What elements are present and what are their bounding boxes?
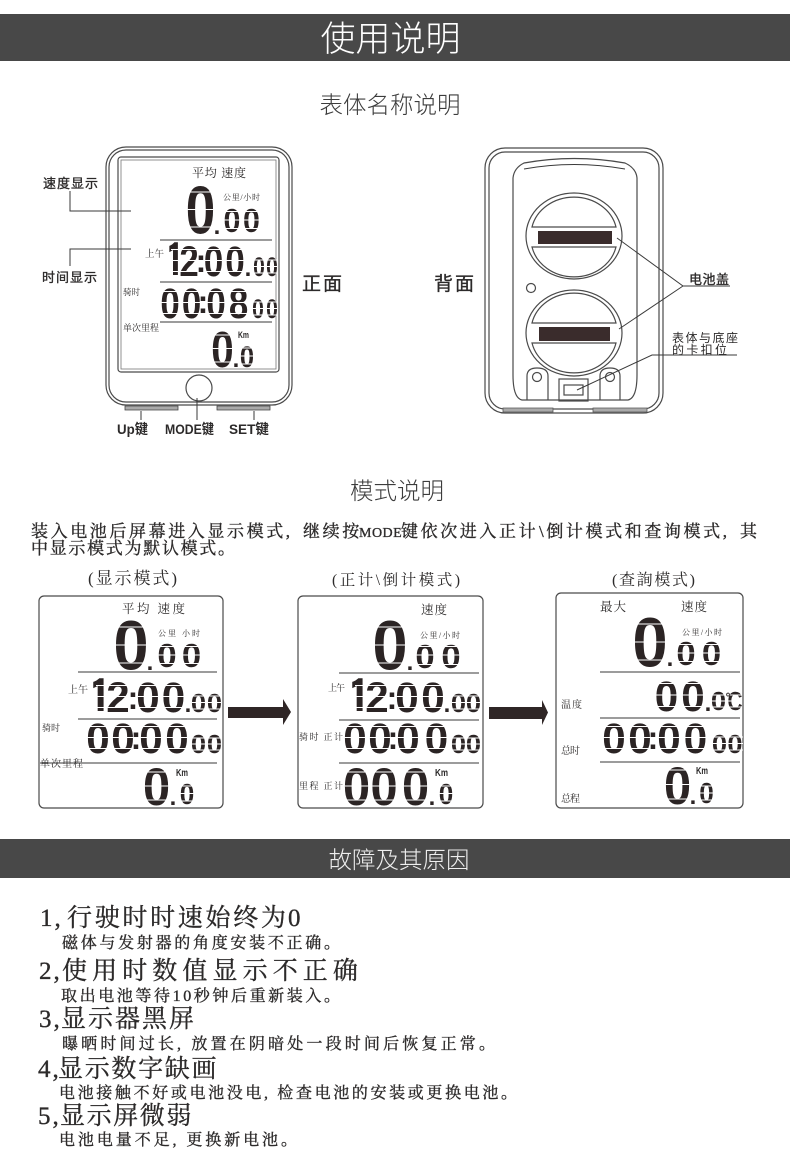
time reading: 0 (207, 689, 222, 718)
label: single trip: 单次里程 (40, 757, 83, 770)
total distance reading: . (690, 783, 696, 810)
trip reading: 0 (180, 778, 194, 810)
callout: battery cover: 电池盖 (689, 272, 729, 287)
time reading 12:00.00: 0 (266, 253, 278, 283)
icon: mode button (186, 375, 212, 401)
header bar: usage instructions: 使用说明 (320, 20, 461, 59)
time reading: : (387, 680, 397, 716)
time reading: 1 (89, 676, 111, 718)
speed reading: 0 (372, 607, 408, 685)
trip reading (143, 757, 194, 816)
temperature reading: . (705, 690, 711, 717)
time reading (89, 674, 222, 722)
speed reading (372, 607, 461, 685)
total distance reading: 0 (699, 777, 714, 809)
total time reading: 0 (727, 730, 743, 759)
ride time reading 00:08 00: : (198, 284, 208, 320)
fault 4: 电池接触不好或电池没电, 检查电池的安装或更换电池。 (59, 1084, 517, 1102)
arrow: display to count mode (228, 699, 291, 725)
time reading: 0 (451, 689, 466, 718)
time reading 12:00.00: . (245, 255, 251, 282)
ride time reading (86, 715, 222, 763)
time reading 12:00.00: 0 (225, 239, 245, 286)
text: mode introduction: 中显示模式为默认模式。 (31, 539, 237, 558)
time reading 12:00.00: 1 (166, 239, 184, 281)
fault 3: 曝晒时间过长, 放置在阴暗处一段时间后恢复正常。 (62, 1035, 495, 1053)
label: AM: 上午 (68, 683, 88, 696)
time reading: . (185, 691, 191, 718)
button labels (117, 421, 269, 437)
fault 2: 使用时数值显示不正确 (62, 957, 363, 985)
label: km: Km (238, 330, 249, 341)
fault 1: 磁体与发射器的角度安装不正确。 (62, 934, 340, 952)
time reading 12:00.00 (166, 239, 278, 286)
dividers (600, 672, 740, 762)
battery cover top (526, 193, 622, 279)
time reading 12:00.00: : (196, 243, 206, 279)
fault 1: 0 (288, 905, 300, 932)
button leader lines (141, 398, 254, 420)
panel: count mode screen (298, 596, 483, 816)
callout: body and base latch: 表体与底座 (672, 330, 738, 345)
fault 1: 行驶时时速始终为 (67, 904, 289, 932)
device outline front (106, 147, 292, 410)
label: km per hour: 公里/小时 (420, 630, 460, 640)
speed reading: 0 (676, 636, 696, 673)
time reading: : (128, 680, 138, 716)
total time reading: 0 (712, 730, 727, 759)
fault 4 (38, 1055, 517, 1102)
trip reading 0.0 km: 0 (211, 320, 234, 378)
speed reading 0.00: 0 (243, 202, 260, 239)
label: temperature: 温度 (561, 698, 582, 711)
caption: count mode: (正计\倒计模式) (332, 570, 460, 589)
ride time reading 00:08 00: 0 (182, 281, 201, 328)
callout: speed display (43, 176, 131, 211)
temperature reading: 0 (681, 673, 705, 721)
time reading: 0 (395, 674, 419, 722)
fault 4: 4, (38, 1056, 61, 1083)
time reading (348, 674, 481, 722)
fault 5: 电池电量不足, 更换新电池。 (59, 1131, 297, 1149)
caption: display mode: (显示模式) (88, 569, 177, 588)
temperature reading: ° (726, 690, 731, 704)
dividers (40, 672, 217, 763)
fault 5: 5, (38, 1103, 61, 1130)
speed reading 0.00: 0 (224, 202, 240, 239)
distance reading: 0 (343, 757, 370, 816)
small hole (526, 284, 536, 292)
trip reading 0.0 km: . (233, 346, 239, 373)
speed reading: . (407, 649, 413, 676)
label: AM: 上午 (328, 682, 345, 693)
distance reading: 0 (370, 757, 398, 816)
text: mode introduction: \倒计模式和查询模式, (539, 522, 730, 541)
speed reading: 0 (182, 638, 201, 675)
caption: query mode: (查詢模式) (612, 570, 695, 589)
panel: display mode screen (39, 596, 223, 816)
label: km: Km (176, 768, 188, 779)
arrow: count to query mode (489, 700, 548, 725)
label: average speed: 平均 速度 (192, 165, 246, 180)
temperature reading: 0 (655, 673, 678, 721)
panel: query mode screen (556, 593, 743, 815)
ride time reading: 0 (425, 715, 448, 763)
time reading 12:00.00: 0 (253, 253, 265, 283)
speed reading: 0 (441, 639, 461, 676)
fault list (38, 904, 517, 1149)
distance reading (343, 757, 453, 816)
callout: time display (42, 249, 131, 285)
callout: body and base latch: 的卡扣位 (672, 342, 727, 357)
speed reading 0.00: . (214, 213, 220, 240)
speed reading 0.00: 0 (186, 172, 215, 248)
ride time reading: : (388, 720, 398, 756)
temperature reading (655, 673, 743, 721)
text: mode introduction (31, 521, 760, 558)
temperature reading: C (727, 687, 743, 716)
label: total time: 总时 (561, 744, 580, 757)
panel: back view of the meter (485, 148, 738, 413)
header bar: faults and causes: 故障及其原因 (328, 847, 470, 873)
speed reading: . (667, 645, 673, 672)
callout: battery cover (617, 238, 730, 329)
header bar: faults and causes (0, 839, 790, 878)
speed reading: 0 (702, 636, 721, 673)
total time reading: 0 (602, 715, 626, 763)
fault 5: 显示屏微弱 (60, 1102, 193, 1130)
ride time reading 00:08 00: 0 (206, 281, 226, 328)
callout: time display: 时间显示 (42, 270, 97, 285)
fault 5 (38, 1102, 297, 1149)
label: speed: 速度 (681, 599, 707, 614)
label: km: Km (696, 766, 708, 777)
time reading 12:00.00: 0 (204, 239, 223, 286)
total time reading (602, 715, 743, 763)
callout: body and base latch (577, 330, 738, 390)
ride time reading: 0 (368, 715, 392, 763)
speed reading: 0 (157, 638, 177, 675)
label: single trip: 单次里程 (123, 322, 159, 333)
ride time reading 00:08 00: 0 (266, 295, 278, 325)
total time reading: 0 (684, 715, 707, 763)
speed reading: 0 (113, 607, 149, 685)
ride time reading: 0 (86, 715, 110, 763)
text: mode introduction: 继续按 (303, 522, 362, 541)
text: mode introduction: 装入电池后屏幕进入显示模式, (31, 522, 293, 541)
text: mode introduction: 键依次进入正计 (401, 522, 538, 541)
speed reading (632, 604, 721, 682)
label: back side: 背面 (434, 273, 474, 295)
time reading: . (444, 691, 450, 718)
speed reading (113, 607, 201, 685)
trip reading: 0 (143, 757, 170, 816)
ride time reading: 0 (191, 730, 206, 759)
ride time reading 00:08 00: 0 (252, 295, 264, 325)
label: maximum: 最大 (600, 599, 626, 614)
total distance reading: 0 (664, 756, 691, 815)
label: total distance: 总程 (561, 792, 580, 805)
dividers (339, 673, 479, 763)
label: km per hour: 公里 小时 (158, 628, 200, 638)
panel: front view of the meter (42, 147, 292, 437)
time reading: 2 (106, 674, 130, 722)
label: AM: 上午 (145, 248, 165, 260)
label: ride time: 骑时 (123, 287, 141, 297)
label: ride time: 骑时 (42, 722, 60, 733)
callout: speed display: 速度显示 (43, 176, 98, 191)
ride time reading: 0 (139, 715, 163, 763)
fault 3: 显示器黑屏 (61, 1006, 196, 1033)
ride time reading (343, 715, 481, 763)
label: speed: 速度 (421, 602, 447, 617)
time reading: 0 (421, 674, 445, 722)
ride time reading: 0 (343, 715, 367, 763)
ride time reading 00:08 00: 0 (160, 281, 180, 328)
button labels: MODE键 (165, 421, 214, 437)
button labels: SET键 (229, 421, 269, 437)
ride time reading: 0 (451, 730, 466, 759)
distance reading: 0 (402, 757, 429, 816)
fault 3: 3, (39, 1006, 62, 1033)
total time reading: : (648, 720, 658, 756)
ride time reading: 0 (165, 715, 189, 763)
fault 1: 1, (40, 905, 63, 932)
distance reading: . (429, 784, 435, 811)
time reading: 0 (191, 689, 206, 718)
ride time reading: : (131, 720, 141, 756)
time reading: 2 (365, 674, 389, 722)
ride time reading: 0 (466, 730, 481, 759)
label: ride time count: 骑时 正计 (299, 731, 343, 742)
heading: mode description: 模式说明 (350, 478, 444, 504)
text: mode introduction: MODE (359, 526, 402, 541)
time reading 12:00.00: 2 (179, 239, 199, 286)
ride time reading 00:08 00 (160, 281, 278, 328)
trip reading: . (170, 784, 176, 811)
time reading: 0 (136, 674, 160, 722)
ride time reading 00:08 00: 8 (229, 281, 248, 328)
temperature reading: 0 (711, 687, 726, 716)
header bar: usage instructions (0, 14, 790, 61)
label: distance count: 里程 正计 (299, 780, 343, 791)
fault 2: 2, (39, 958, 62, 985)
ride time reading: 0 (111, 715, 135, 763)
distance reading: 0 (439, 778, 453, 810)
speed reading: . (147, 649, 153, 676)
fault 2 (39, 957, 363, 1005)
ride time reading: 0 (207, 730, 222, 759)
text: mode introduction: 其 (740, 521, 760, 541)
fault 3 (39, 1006, 495, 1053)
label: km per hour: 公里/小时 (223, 192, 260, 202)
label: km per hour: 公里/小时 (682, 627, 722, 637)
device outline back (485, 148, 663, 413)
speed reading 0.00 (186, 172, 260, 248)
divider lines (160, 240, 272, 322)
fault 2: 取出电池等待10秒钟后重新装入。 (61, 987, 340, 1005)
fault 4: 显示数字缺画 (58, 1055, 218, 1083)
time reading: 1 (348, 676, 370, 718)
speed reading: 0 (632, 604, 668, 682)
trip reading 0.0 km: 0 (240, 340, 254, 373)
total distance reading (664, 756, 714, 815)
speed reading: 0 (415, 639, 435, 676)
ride time reading: 0 (396, 715, 420, 763)
label: average speed: 平均 速度 (122, 601, 185, 616)
mounting tabs (527, 368, 620, 400)
battery cover bottom (526, 290, 622, 376)
time reading: 0 (162, 674, 185, 722)
trip reading 0.0 km (211, 320, 254, 378)
total time reading: 0 (657, 715, 681, 763)
label: front side: 正面 (302, 274, 342, 295)
label: km: Km (435, 768, 448, 779)
snap latch (559, 379, 588, 401)
time reading: 0 (466, 689, 481, 718)
button labels: Up键 (117, 421, 148, 437)
total time reading: 0 (628, 715, 652, 763)
heading: part names: 表体名称说明 (320, 92, 460, 118)
fault 1 (40, 904, 340, 952)
